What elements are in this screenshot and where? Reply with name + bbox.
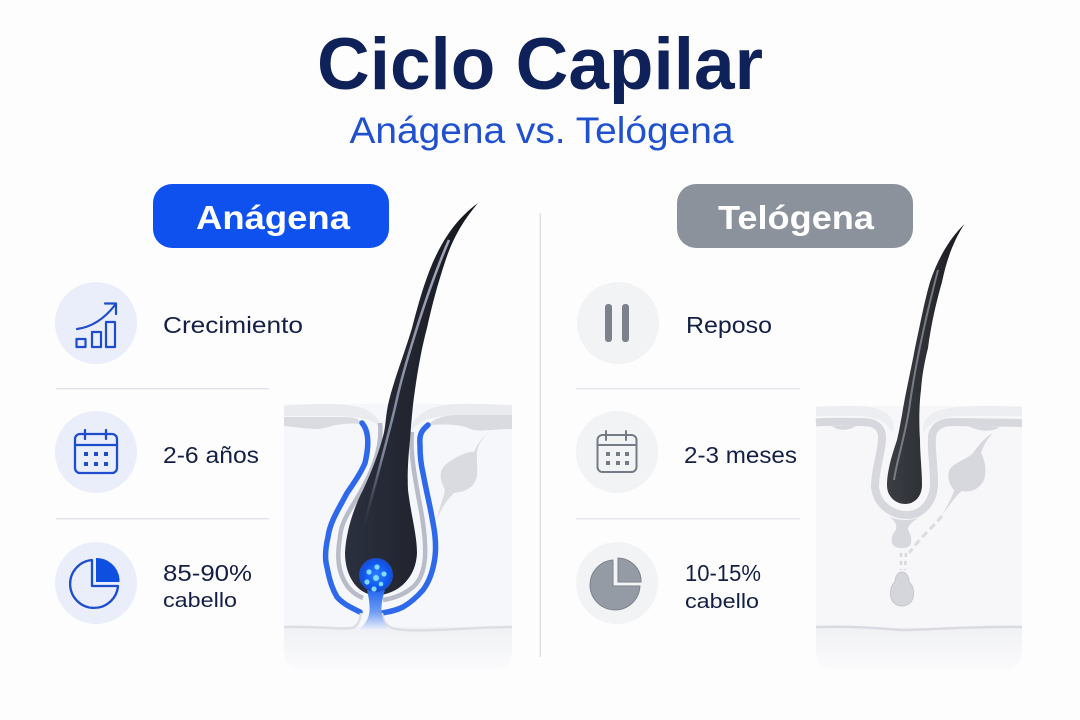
sebaceous gland bbox=[437, 431, 490, 520]
stat: duration bbox=[55, 411, 259, 493]
shed droplet bbox=[890, 572, 914, 606]
stat: rest bbox=[577, 282, 772, 364]
subtitle: Anágena vs. Telógena bbox=[350, 110, 734, 151]
icon: growth chart bbox=[55, 282, 137, 364]
lower skin line bbox=[816, 627, 1022, 630]
stat: growth bbox=[55, 282, 303, 364]
papilla bbox=[359, 558, 393, 592]
hair highlight bbox=[894, 270, 938, 480]
stat: share: cabello bbox=[163, 589, 237, 612]
hair shaft bbox=[887, 224, 964, 504]
skin upper layer bbox=[816, 406, 894, 432]
badge: Anágena bbox=[153, 184, 389, 248]
stat: share bbox=[55, 542, 252, 624]
illustration: resting follicle bbox=[816, 224, 1022, 670]
title: Ciclo Capilar bbox=[317, 24, 763, 105]
badge: Anágena: Anágena bbox=[196, 199, 351, 236]
center divider bbox=[540, 213, 541, 657]
stat: share bbox=[576, 542, 761, 624]
label: Crecimiento bbox=[163, 312, 303, 338]
label: Reposo bbox=[686, 312, 772, 338]
hair shaft bbox=[345, 203, 478, 595]
sheath tail bbox=[890, 517, 920, 548]
follicle sheath band bbox=[816, 422, 1022, 515]
panel: telogen bbox=[576, 184, 1022, 670]
icon: pie chart bbox=[576, 542, 658, 624]
blue sheath bbox=[326, 423, 368, 612]
skin panel bbox=[816, 406, 1022, 670]
icon: calendar bbox=[576, 411, 658, 493]
icon: calendar bbox=[55, 411, 137, 493]
sebaceous gland bbox=[942, 433, 993, 515]
skin panel bbox=[284, 404, 512, 670]
label: 2-6 años bbox=[163, 442, 259, 468]
badge: Telógena bbox=[677, 184, 913, 248]
hair highlight bbox=[363, 240, 449, 530]
stat: share: cabello bbox=[685, 590, 759, 613]
papilla stalk bbox=[359, 590, 389, 630]
stat: duration bbox=[576, 411, 797, 493]
skin upper layer bbox=[284, 404, 381, 428]
icon: pause bbox=[577, 282, 659, 364]
label: 10-15% bbox=[685, 560, 761, 586]
panel: anagen bbox=[55, 184, 512, 670]
illustration: growing follicle bbox=[284, 203, 512, 670]
detaching duct dashes bbox=[909, 516, 942, 553]
outer root sheath (grey) bbox=[338, 423, 380, 598]
icon: pie chart bbox=[55, 542, 137, 624]
label: 85-90% bbox=[163, 560, 252, 586]
badge: Telógena: Telógena bbox=[718, 199, 875, 236]
epidermis bumps bbox=[832, 426, 1000, 431]
label: 2-3 meses bbox=[684, 442, 797, 468]
lower skin line bbox=[284, 613, 512, 630]
